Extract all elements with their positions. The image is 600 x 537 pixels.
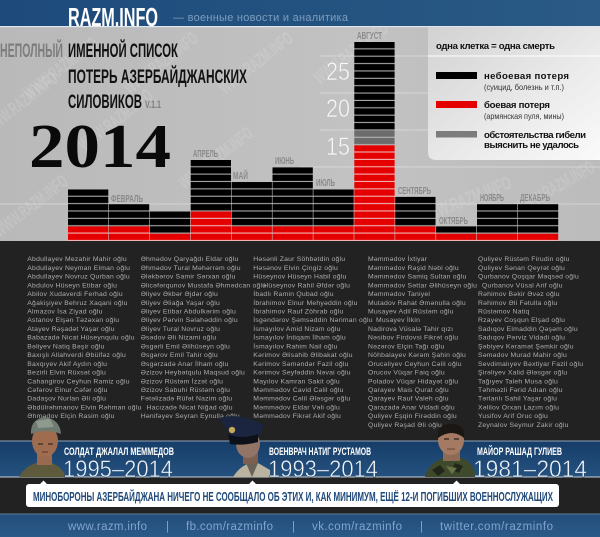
name list column 1 [27, 256, 142, 420]
name list column 3: İsmayılov Amid Nizam oğlu [253, 324, 341, 333]
gridlines [0, 56, 600, 204]
name list column 4: Nadirova Vüsalə Tahir qızı [368, 326, 453, 333]
name list column 1: Baxqıyev Akif Aydın oğlu [27, 361, 107, 368]
name: soldier Jalal Mammadov: СОЛДАТ ДЖАЛАЛ МЕММЕДОВ [64, 446, 174, 458]
name list column 3: Mayılov Kamran Sakit oğlu [253, 378, 340, 385]
name list column 2: Fətəlizadə Rüfət Nazim oğlu [141, 396, 232, 403]
name list column 5: Qurbanov Qoşqar Məqsəd oğlu [478, 274, 579, 281]
name list column 3: Həsənli Zaur Söhbətdin oğlu [253, 256, 345, 263]
name list column 1: Bezirli Elvin Rüxsət oğlu [27, 370, 106, 377]
month labels: АПРЕЛЬ [193, 149, 218, 160]
name list column 1: Almazov İsa Ziyad oğlu [27, 306, 103, 316]
y axis numbers: 15 [326, 133, 350, 161]
bar: October [436, 226, 476, 241]
legend item: combat: (армянская пуля, мины) [484, 111, 564, 121]
y axis numbers: 25 [326, 58, 350, 86]
name list column 4: Nəsibov Firdovsi Fikrət oğlu [368, 335, 458, 342]
name list column 5: Yusifov Arif Oruc oğlu [478, 413, 548, 420]
legend heading: одна клетка = одна смерть [436, 41, 555, 52]
name list column 3: İsmayılov İntiqam İlham oğlu [253, 333, 346, 342]
name list column 2: Əsədov Əli Nizami oğlu [141, 335, 216, 342]
name list column 3: Kərimov Seyfəddin Nəvai oğlu [253, 370, 351, 377]
name: soldier Jalal Mammadov: 1995–2014 [63, 456, 173, 483]
name list column 3: İbrahimov Rauf Zöhrab oğlu [253, 306, 344, 316]
portrait: military doctor Natig Rustamov [219, 416, 270, 477]
month labels: НОЯБРЬ [480, 193, 504, 204]
name: soldier Jalal Mammadov [63, 446, 174, 483]
title: V.1.1 [145, 99, 161, 111]
blue memorial band [0, 440, 600, 478]
name list column 5 [478, 256, 583, 429]
name list column 3: İsmayılov Rahim Nail oğlu [253, 341, 338, 350]
name list column 2: Əliyev Əkbər Əjdər oğlu [141, 291, 218, 298]
name list column 1: Ağakişiyev Behruz Xaqani oğlu [27, 300, 128, 307]
title [0, 40, 247, 113]
name list column 3: İsgəndərov Şəmsəddin Nəriman oğlu [253, 315, 373, 324]
name list column 5: Şəbiyev Kəramət Şəmkir oğlu [478, 343, 574, 350]
name list column 3 [253, 256, 373, 420]
legend item: combat: боевая потеря [484, 100, 550, 111]
legend item: unknown [436, 130, 586, 151]
name: military doctor Natig Rustamov: ВОЕНВРАЧ НАТИГ РУСТАМОВ [269, 446, 371, 458]
name list column 2: Əzizov Heybətqulu Maqsud oğlu [141, 370, 245, 377]
name list column 1: Astanov Elşən Təzəxan oğlu [27, 317, 119, 324]
name list column 2: Əsgərov Emil Tahir oğlu [141, 352, 218, 359]
month labels: АВГУСТ [357, 31, 382, 42]
name list column 1: Abdulov Hüseyn Etibar oğlu [27, 282, 117, 289]
name list column 5: Təhməzli Fərid Adıan oğlu [478, 387, 563, 394]
name list column 5: Zeynalov Seymur Zakir oğlu [478, 422, 569, 429]
name list column 2: Əhmədov Qaryağdı Eldar oğlu [141, 256, 239, 263]
name list column 2: Əzizov Sabuhi Rüstəm oğlu [141, 387, 230, 394]
y axis numbers: 20 [326, 95, 350, 123]
footer [0, 514, 600, 537]
footer: fb.com/razminfo [186, 521, 273, 533]
watermark pattern: WWW.RAZM.INFO [414, 173, 515, 230]
bar: August [354, 42, 395, 241]
name list column 1: Atayev Rəşadət Yaşar oğlu [27, 326, 115, 333]
legend item: non-combat: (суицид, болезнь и т.п.) [484, 82, 564, 92]
bar: January [68, 189, 108, 241]
name list column 2: Əliyev Pərvin Səlahəddin oğlu [141, 317, 238, 324]
name list column 3: İbadlı Ramin Qubad oğlu [253, 289, 334, 298]
footer: | [420, 521, 423, 533]
name list column 2: Əzizov Rüstəm İzzət oğlu [141, 376, 223, 385]
name list column 4: Nəzərov Elçin Tağı oğlu [368, 343, 445, 350]
watermark pattern [0, 18, 599, 242]
bar: July [313, 189, 354, 241]
title: ПОТЕРЬ АЗЕРБАЙДЖАНСКИХ [68, 66, 247, 88]
name list column 1: Babazadə Nicat Hüseynqulu oğlu [27, 335, 135, 342]
footer: | [292, 521, 295, 533]
month labels: ИЮНЬ [275, 156, 294, 167]
name list column 3: Kərimov Səməndər Fazil oğlu [253, 361, 349, 368]
legend item: unknown: обстоятельства гибели [484, 130, 586, 141]
name: military doctor Natig Rustamov [268, 446, 378, 483]
name list column 5: Tağıyev Taleh Musa oğlu [478, 378, 558, 385]
name list column 2: Əliyev Tural Novruz oğlu [141, 326, 220, 333]
header bar [0, 0, 600, 32]
name list column 3: Məmmədov Fikrət Akif oğlu [253, 413, 341, 420]
month labels: МАЙ [233, 169, 248, 182]
name list column 2: Əliyev Əliağa Yaşar oğlu [141, 300, 220, 307]
name list column 2: Hənifəyev Seyran Eynulla oğlu [141, 413, 240, 420]
name list column 1: Bəliyev Natiq Bəşir oğlu [27, 343, 105, 350]
bar chart: deaths by month [68, 42, 558, 241]
logo: RAZM.INFO: RAZM.INFO [68, 2, 158, 32]
name list column 3: İbrahimov Elnur Mehyəddin oğlu [253, 298, 358, 307]
name list column 5: Səmədov Murad Mahir oğlu [478, 352, 567, 359]
name list column 4: Məmmədov Rəşid Nəbi oğlu [368, 265, 459, 272]
portrait: soldier Jalal Mammadov [19, 417, 66, 477]
name list column 4 [368, 254, 477, 429]
name list column 4: Qarazadə Anar Vidadi oğlu [368, 404, 455, 411]
panel: legend [428, 27, 600, 160]
callout [26, 480, 559, 507]
name list column 5: Tərlanlı Sahil Yaşar oğlu [478, 396, 557, 403]
footer: www.razm.info [67, 521, 147, 533]
name list column 5: Rəhimov Əli Fətulla oğlu [478, 300, 557, 307]
name list column 2: Əsgərzadə Anar İlham oğlu [141, 359, 229, 368]
year 2014: 2014 [29, 113, 171, 181]
name list column 5: Quliyev Rüstəm Firudin oğlu [478, 256, 570, 263]
name list column 4: Quliyev Eşqin Firəddin oğlu [368, 413, 457, 420]
month labels [111, 31, 550, 227]
name list column 5: Rüstəmov Natiq [478, 308, 530, 316]
title: ИМЕННОЙ СПИСОК [68, 40, 178, 62]
month labels: ИЮЛЬ [316, 178, 335, 189]
name: major Rashad Guliyev [473, 445, 587, 483]
name list column 3: Hüseynov Hüseyn Habil oğlu [253, 274, 347, 281]
name list column 1: Dadaşov Nurlan Əli oğlu [27, 396, 106, 403]
footer: vk.com/razminfo [312, 521, 402, 533]
name list column 4: Quliyev Rəşad Əli oğlu [368, 422, 442, 429]
bar: September [395, 197, 436, 241]
name list column 3: Həsənov Elvin Çingiz oğlu [253, 265, 338, 272]
month labels: ОКТЯБРЬ [439, 216, 468, 227]
tagline: — военные новости и аналитика [173, 12, 349, 24]
name list column 4: Məmmədov Taniyel [368, 291, 430, 298]
watermark pattern: WWW.RAZM.INFO [75, 85, 157, 156]
bar: November [477, 204, 517, 241]
name list column 4: Nöhbalayev Kərəm Şahin oğlu [368, 352, 466, 359]
bar: March [150, 212, 190, 241]
name list column 2: Əlicəfərqunov Mustafa Əhmədcan oğlu [141, 282, 266, 289]
name list column 4: Məmmədov İxtiyar [368, 254, 428, 263]
legend item: unknown: выяснить не удалось [484, 140, 579, 151]
name list column 4: Qarayev Mais Qurat oğlu [368, 387, 449, 394]
bar: February [109, 204, 149, 241]
legend item: non-combat [436, 71, 569, 92]
name list column 4: Orucov Vüqar Faiq oğlu [368, 370, 445, 377]
name list column 1: Əbdülrəhmanov Elvin Rəhman oğlu [27, 404, 142, 411]
name list column 2: Əhmədov Tural Məhərrəm oğlu [141, 265, 241, 272]
name list column 5: Şirəliyev Xalid Ələsgər oğlu [478, 370, 567, 377]
name list column 5: Sadıqov Elmaddin Qəşəm oğlu [478, 326, 578, 333]
name list column 4: Musayev Adil Rüstəm oğlu [368, 308, 454, 316]
month labels: ФЕВРАЛЬ [111, 194, 143, 205]
name list column 3: Məmmədov Cəlil Ələsgər oğlu [253, 396, 350, 403]
title: СИЛОВИКОВ [68, 92, 142, 113]
name list column 4: Poladov Vüqar Hidayət oğlu [368, 378, 458, 385]
name list column 4: Qarayev Rauf Valeh oğlu [368, 396, 449, 403]
name list column 2: Hacızadə Nicat Niğad oğlu [146, 404, 233, 411]
name list column 4: Musayev İlkin [376, 315, 420, 324]
name list column 5: Sevdimalıyev Bəxtiyar Fazil oğlu [478, 361, 583, 368]
name list column 5: Qurbanov Vüsal Arif oğlu [482, 282, 563, 289]
name list column 4: Məmmədov Samiq Sultan oğlu [368, 274, 467, 281]
name list column 2: Əsgərli Emil Əlihüseyn oğlu [141, 343, 230, 350]
name list column 3: Məmmədov Eldar Vəli oğlu [253, 404, 340, 411]
title: НЕПОЛНЫЙ [0, 40, 63, 62]
name list column 1: Baxışlı Allahverdi Əbülfəz oğlu [27, 352, 126, 359]
name list column 1: Cahangirov Ceyhun Ramiz oğlu [27, 378, 130, 385]
portrait: major Rashad Guliyev [425, 424, 476, 477]
bar: June [272, 167, 313, 241]
name list column 4: Orucəliyev Ceyhun Cəlil oğlu [368, 361, 462, 368]
month labels: ДЕКАБРЬ [520, 193, 550, 204]
name list column 1: Abdullayev Neyman Elman oğlu [27, 265, 130, 272]
legend item: combat [436, 100, 564, 121]
name list column 2: Ələkbərov Samir Sərxan oğlu [141, 274, 236, 281]
name list column 1: Əhmədov Elçin Rasim oğlu [27, 413, 115, 420]
bar: April [191, 160, 231, 241]
footer: | [166, 521, 169, 533]
name list column 1: Abilov Xudaverdi Ferhad oğlu [27, 291, 123, 298]
gray chart background [0, 27, 600, 241]
bar: May [232, 182, 272, 241]
name list column 2: Əliyev Etibar Abdulkərim oğlu [141, 308, 236, 316]
name list column 1: Abdullayev Mezahir Mahir oğlu [27, 256, 127, 263]
legend item: non-combat: небоевая потеря [484, 71, 569, 82]
name list column 5: Rəhimov Bəkir Əvəz oğlu [478, 291, 560, 298]
name list column 3: Kərimov Əlisahib Əlibakat oğlu [253, 352, 353, 359]
name list column 5: Rzayev Coşqun Elşad oğlu [478, 317, 565, 324]
month labels: СЕНТЯБРЬ [398, 186, 431, 197]
name list column 1: Cəfərov Elnur Cəfər oğlu [27, 387, 108, 394]
y axis numbers [326, 58, 350, 161]
name list column 3: Hüseynov Rahil Əfdər oğlu [263, 282, 350, 289]
name list column 3: Məmmədov Cavid Cəlil oğlu [253, 387, 344, 394]
footer: twitter.com/razminfo [440, 521, 553, 533]
name list column 5: Xəlilov Orxan Lazım oğlu [478, 404, 559, 411]
name list column 4: Mutadov Rahat Əmənulla oğlu [368, 300, 466, 307]
name: military doctor Natig Rustamov: 1993–2014 [268, 456, 378, 483]
name list column 4: Məmmədov Səttar Əlihüseyn oğlu [368, 282, 477, 289]
bar: December [518, 204, 558, 241]
name list column 5: Quliyev Sənan Qeyrət oğlu [478, 265, 565, 272]
name list column 1: Abdullayev Novruz Qurban oğlu [27, 274, 130, 281]
watermark pattern: WWW.RAZM.INFO [175, 123, 257, 194]
name list column 5: Sadıqov Pərviz Vidadi oğlu [478, 335, 565, 342]
name: major Rashad Guliyev: 1981–2014 [473, 456, 587, 483]
name list column 2 [141, 256, 266, 420]
